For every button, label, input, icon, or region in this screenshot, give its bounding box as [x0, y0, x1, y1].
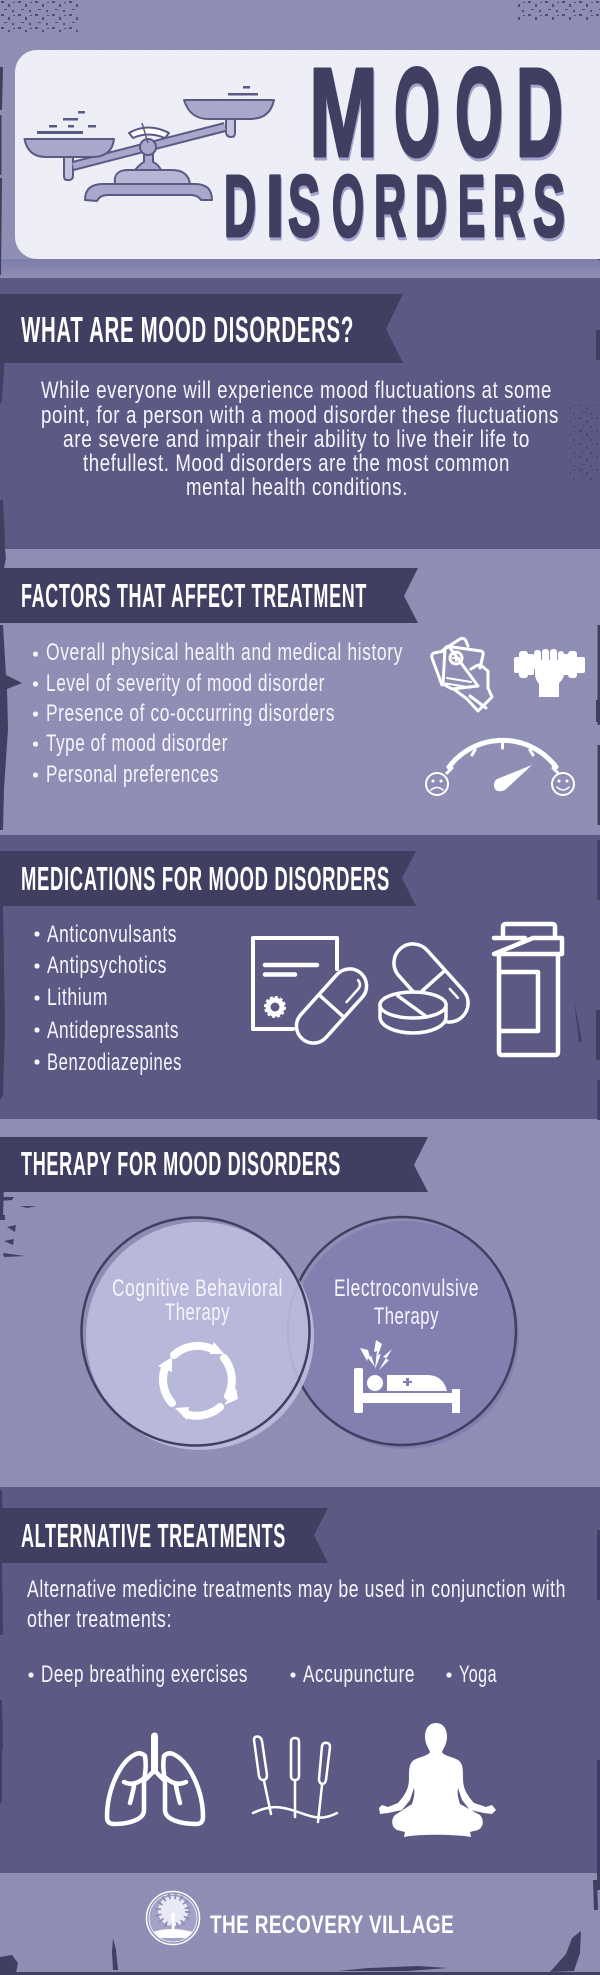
banner heading: ALTERNATIVE TREATMENTS [21, 1517, 286, 1554]
banner heading [0, 294, 403, 363]
icon: prescription and capsule [253, 938, 374, 1050]
icon: lungs [107, 1736, 203, 1824]
title panel: R [374, 158, 406, 255]
icon: tree logo [146, 1892, 200, 1944]
title text: O [455, 42, 503, 183]
left circle: cognitive behavioral therapy: Cognitive Behavioral [112, 1275, 283, 1302]
title panel: I [266, 158, 284, 255]
right circle: electroconvulsive therapy [288, 1217, 519, 1449]
right circle: electroconvulsive therapy: Therapy [374, 1303, 439, 1330]
factors list: Level of severity of mood disorder [46, 670, 325, 697]
panel: factors that affect treatment [0, 568, 585, 795]
medications list: Benzodiazepines [47, 1049, 182, 1076]
treatments list: Yoga [459, 1661, 497, 1688]
icon: mood gauge [426, 740, 574, 795]
medications list: Anticonvulsants [47, 921, 177, 948]
factors list: Type of mood disorder [46, 730, 228, 757]
factors list [33, 639, 403, 788]
title panel: S [288, 158, 320, 255]
banner heading: WHAT ARE MOOD DISORDERS? [21, 309, 354, 350]
paragraph: mental health conditions. [186, 474, 408, 501]
icon: acupuncture needles [253, 1736, 337, 1822]
banner heading [0, 1508, 328, 1563]
treatments list: Deep breathing exercises [41, 1661, 248, 1688]
banner heading [0, 568, 418, 623]
title panel: E [458, 158, 485, 255]
panel: what are mood disorders [0, 294, 559, 501]
treatments list [28, 1661, 497, 1688]
banner heading [0, 1137, 428, 1192]
right circle: electroconvulsive therapy: Electroconvulsive [334, 1275, 479, 1302]
icon: capsule and tablet [380, 936, 476, 1033]
banner heading: THERAPY FOR MOOD DISORDERS [21, 1145, 341, 1182]
icon: pill bottle [494, 924, 562, 1055]
title panel: D [224, 158, 256, 255]
medications list [34, 921, 182, 1076]
footer: logo [146, 1892, 454, 1944]
intro text [27, 1576, 566, 1633]
medications list: Lithium [47, 984, 108, 1011]
title panel: O [332, 158, 364, 255]
intro text: other treatments: [27, 1606, 172, 1633]
icon: medical card in hand [432, 638, 492, 711]
crumbs [37, 86, 258, 134]
title panel: D [415, 158, 447, 255]
icon: fist with dumbbell [514, 649, 585, 697]
treatments list: Accupuncture [303, 1661, 415, 1688]
icon: meditating figure [379, 1723, 496, 1837]
left circle: cognitive behavioral therapy: Therapy [165, 1299, 230, 1326]
panel: therapy [0, 1137, 519, 1450]
title text: O [394, 42, 440, 183]
title panel: R [493, 158, 525, 255]
paragraph [41, 377, 559, 501]
icon: bed with lightning [354, 1340, 460, 1413]
medications list: Antidepressants [47, 1017, 179, 1044]
title panel [15, 42, 600, 259]
icon: balance scale [24, 100, 274, 201]
factors list: Presence of co-occurring disorders [46, 700, 335, 727]
factors list: Overall physical health and medical history [46, 639, 403, 666]
factors list: Personal preferences [46, 761, 219, 788]
medications list: Antipsychotics [47, 952, 167, 979]
footer: logo: THE RECOVERY VILLAGE [210, 1911, 454, 1939]
panel: alternative treatments [0, 1508, 566, 1837]
icon: cycle arrows [158, 1342, 238, 1420]
banner heading [0, 851, 416, 906]
title panel: S [533, 158, 565, 255]
title text: M [309, 42, 378, 183]
panel: medications [0, 851, 562, 1076]
left circle: cognitive behavioral therapy [82, 1218, 314, 1450]
